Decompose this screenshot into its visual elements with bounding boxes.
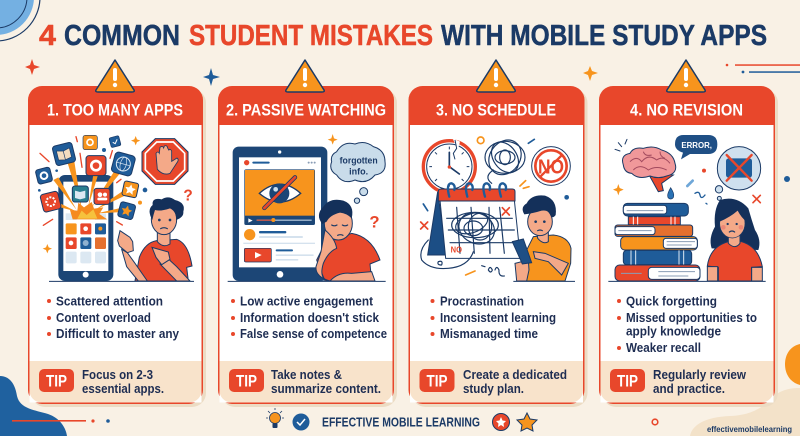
- tip: [229, 368, 381, 396]
- footer text: EFFECTIVE MOBILE LEARNING: [322, 414, 480, 430]
- tip: and practice.: [653, 382, 725, 396]
- figure: confused student: [118, 197, 192, 281]
- sparkle: red: [25, 59, 40, 75]
- list: effects: Difficult to master any: [56, 327, 179, 341]
- speech bubble: error: ERROR,: [681, 141, 712, 150]
- icon: check circle: [292, 414, 310, 430]
- footer: [266, 408, 537, 431]
- icon: no sign: NO: [538, 155, 564, 178]
- decoration: bottom-left line and dots: [12, 419, 110, 423]
- figure: worried student: [707, 199, 762, 281]
- sparkle: orange: [583, 66, 598, 81]
- watermark: effectivemobilelearning: [707, 425, 792, 434]
- figure: student on phone: [512, 195, 571, 281]
- icon: stop sign: [142, 139, 188, 184]
- tip: [420, 368, 567, 396]
- tip: summarize content.: [271, 382, 381, 396]
- panel: no schedule: [408, 60, 588, 407]
- illustration: brain and books: [608, 135, 766, 281]
- list: effects: Mismanaged time: [440, 327, 538, 341]
- illustration: exploding phone: [35, 135, 194, 281]
- icon: brain: [622, 147, 676, 199]
- illustration: tablet video: ?: [369, 212, 380, 231]
- heading: 3. NO SCHEDULE: [436, 100, 556, 120]
- list: effects: apply knowledge: [626, 324, 721, 338]
- books: [615, 203, 700, 281]
- list: effects: Missed opportunities to: [626, 311, 757, 325]
- title: STUDENT MISTAKES: [189, 20, 433, 52]
- list: effects: Low active engagement: [240, 294, 374, 308]
- dot: blue: [784, 176, 790, 182]
- icon: star: [517, 413, 537, 431]
- list: effects: Procrastination: [440, 294, 524, 308]
- tip: [610, 368, 746, 396]
- list: effects: [617, 294, 757, 355]
- tip: TIP: [426, 372, 448, 390]
- list: effects: Quick forgetting: [626, 294, 717, 308]
- illustration: exploding phone: ?: [183, 188, 193, 205]
- list: effects: [231, 294, 387, 341]
- sparkle: blue: [203, 68, 220, 86]
- list: effects: False sense of competence: [240, 327, 387, 341]
- heading: 4. NO REVISION: [630, 100, 743, 120]
- list: effects: Scattered attention: [56, 294, 163, 308]
- title: COMMON: [64, 20, 180, 52]
- list: effects: [430, 294, 556, 341]
- decoration: ring: [652, 419, 658, 425]
- list: effects: Information doesn't stick: [240, 311, 379, 325]
- illustration: tablet video: [228, 134, 386, 281]
- tip: TIP: [617, 372, 638, 390]
- speech bubble: error: [675, 135, 717, 159]
- list: effects: [47, 294, 179, 341]
- calendar: [421, 183, 520, 276]
- scribble: [482, 134, 528, 183]
- thought bubble: forgotten info: [331, 142, 385, 203]
- heading: 1. TOO MANY APPS: [47, 100, 183, 120]
- figure: bored student: [316, 200, 380, 281]
- list: effects: Content overload: [56, 311, 151, 325]
- tip: Focus on 2-3: [82, 368, 153, 382]
- icon: warning triangle: [96, 60, 134, 92]
- tip: essential apps.: [82, 382, 164, 396]
- thought bubble: forgotten info: info.: [349, 166, 368, 176]
- panel: passive watching: [218, 60, 397, 407]
- icon: light bulb: [266, 408, 284, 428]
- decoration: bottom-right blobs: [690, 344, 800, 436]
- tip: TIP: [46, 372, 67, 390]
- tip: [39, 368, 164, 396]
- tip: Create a dedicated: [463, 368, 567, 382]
- icon: warning triangle: [667, 60, 705, 92]
- thought bubble: crossed camera: [715, 147, 761, 200]
- title: [39, 20, 767, 52]
- panel: too many apps: [28, 60, 206, 407]
- heading: 2. PASSIVE WATCHING: [226, 100, 386, 120]
- calendar: NO: [451, 246, 462, 255]
- icon: no sign: [532, 147, 570, 185]
- decoration: top-left circle: [0, 0, 40, 41]
- panel: no revision: [599, 60, 778, 407]
- icon: warning triangle: [477, 60, 515, 92]
- title: 4: [39, 20, 56, 52]
- thought bubble: forgotten info: forgotten: [340, 155, 378, 165]
- decoration: top-right lines: [726, 64, 800, 73]
- icon: star circle: [492, 414, 510, 430]
- tip: Take notes &: [271, 368, 342, 382]
- icon: warning triangle: [286, 60, 324, 92]
- list: effects: Weaker recall: [626, 341, 701, 355]
- list: effects: Inconsistent learning: [440, 311, 556, 325]
- decoration: bottom-left blob: [0, 376, 67, 436]
- tip: study plan.: [463, 382, 524, 396]
- tip: TIP: [236, 372, 257, 390]
- illustration: messy calendar: [421, 134, 575, 281]
- tip: Regularly review: [653, 368, 746, 382]
